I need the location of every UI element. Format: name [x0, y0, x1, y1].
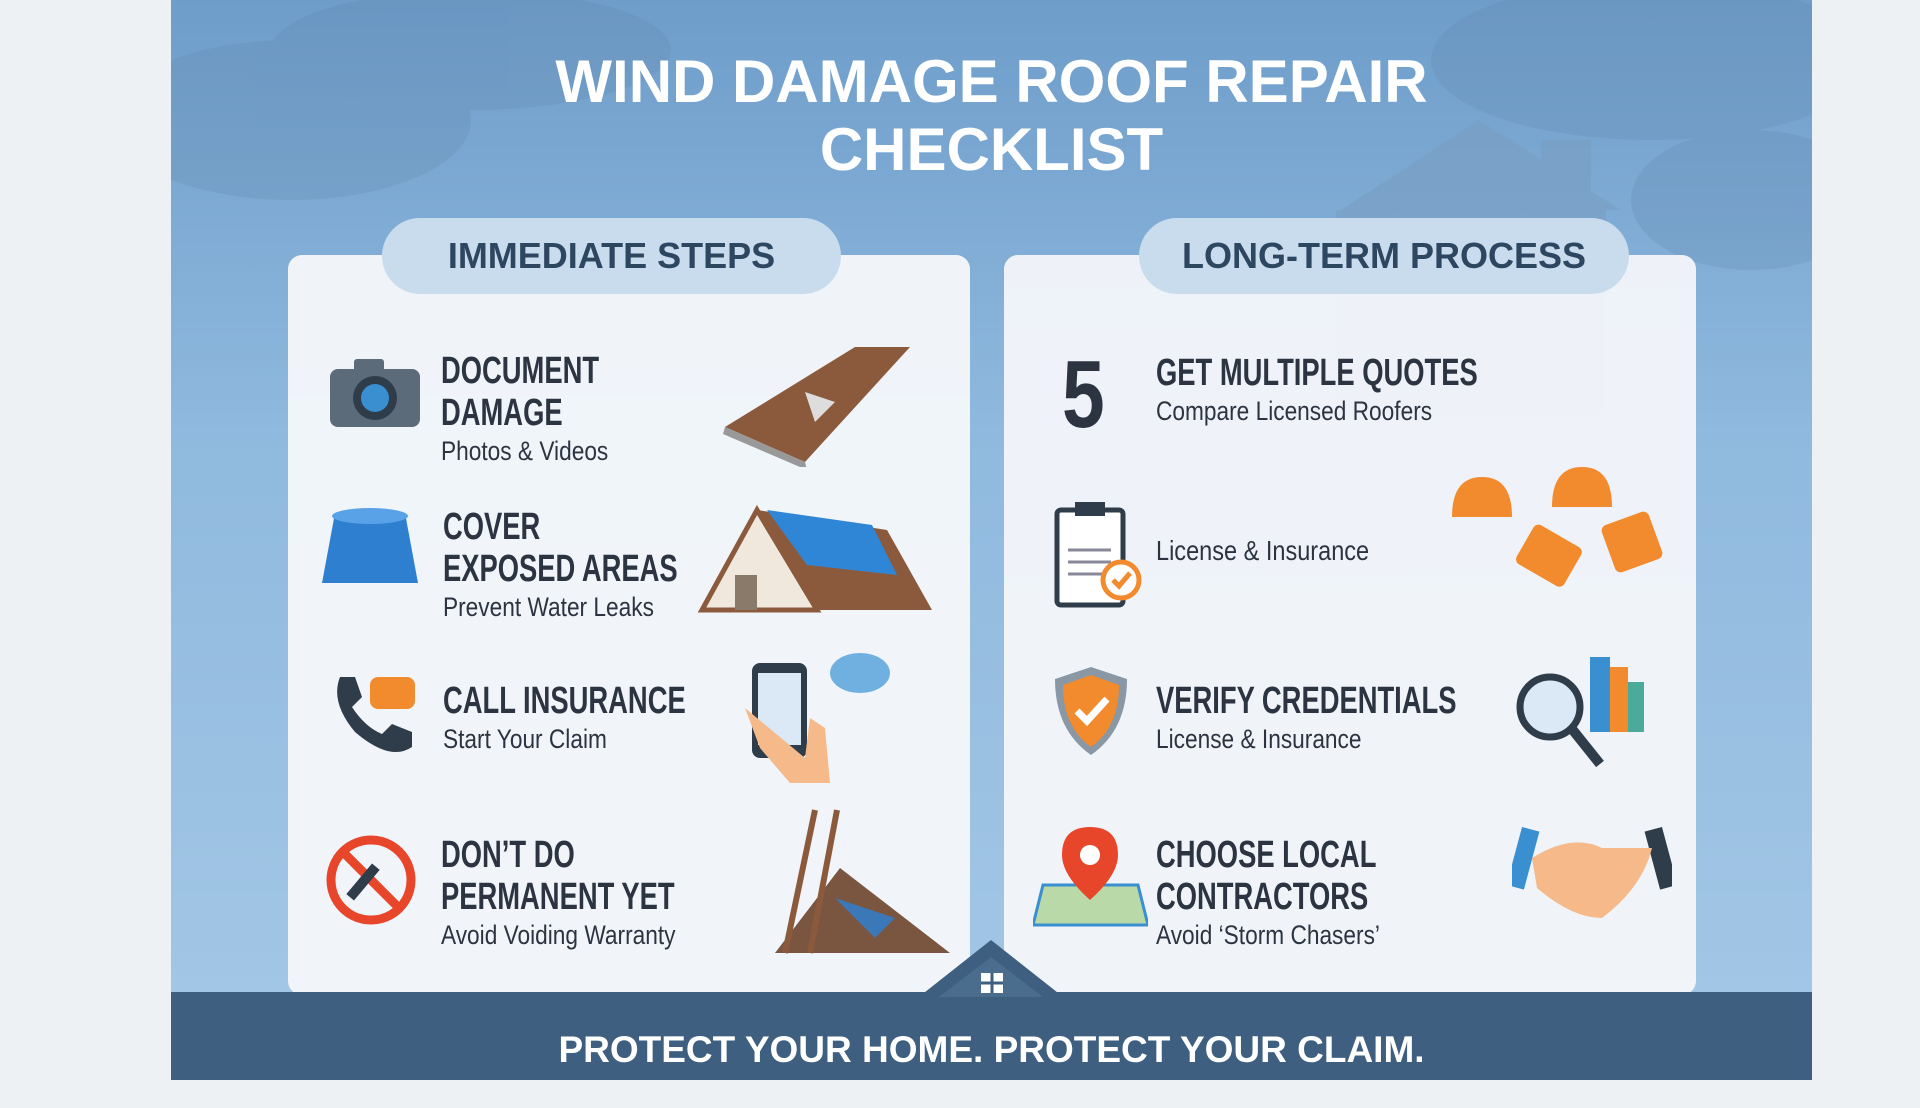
illustration: handshake: [1512, 827, 1672, 918]
text: cover exposed areas: [443, 506, 678, 622]
text: call insurance: Start Your Claim: [443, 724, 607, 754]
text: cover exposed areas: COVER: [443, 506, 540, 548]
title: CHECKLIST: [820, 116, 1163, 183]
text: document damage: Photos & Videos: [441, 436, 608, 466]
heading: long-term process: LONG-TERM PROCESS: [1182, 235, 1586, 276]
text: call insurance: CALL INSURANCE: [443, 680, 686, 722]
text: get multiple quotes: GET MULTIPLE QUOTES: [1156, 352, 1478, 394]
text: don't do permanent yet: [441, 834, 676, 950]
illustration: hand with phone: [745, 653, 890, 783]
text: document damage: DOCUMENT: [441, 350, 599, 392]
text: license & insurance: License & Insurance: [1156, 535, 1369, 566]
icon: camera: [330, 359, 420, 427]
text: call insurance: [443, 680, 686, 754]
heading: long-term process: [1139, 218, 1629, 294]
title: [555, 48, 1428, 183]
text: choose local contractors: CONTRACTORS: [1156, 876, 1368, 918]
illustration: house with tarp: [698, 505, 932, 612]
icon: tarp: [322, 508, 418, 583]
text: document damage: DAMAGE: [441, 392, 563, 434]
number 5: 5: [1062, 341, 1105, 448]
illustration: damaged roof: [723, 347, 910, 467]
text: verify credentials: [1156, 680, 1456, 754]
panel: long-term process: [1004, 255, 1696, 995]
title: WIND DAMAGE ROOF REPAIR: [555, 48, 1428, 115]
footer bar: PROTECT YOUR HOME. PROTECT YOUR CLAIM.: [558, 1029, 1425, 1070]
heading: immediate steps: [382, 218, 841, 294]
panel: immediate steps: [288, 255, 970, 995]
text: get multiple quotes: Compare Licensed Roofers: [1156, 396, 1432, 426]
icon: map pin: [1033, 827, 1148, 926]
text: don't do permanent yet: Avoid Voiding Warranty: [441, 920, 675, 950]
icon: house on footer: [925, 940, 1057, 997]
text: document damage: [441, 350, 608, 466]
text: cover exposed areas: EXPOSED AREAS: [443, 548, 678, 590]
text: choose local contractors: Avoid ‘Storm Chasers’: [1156, 920, 1380, 950]
illustration: magnifier and buildings: [1516, 657, 1644, 768]
text: don't do permanent yet: DON’T DO: [441, 834, 575, 876]
text: cover exposed areas: Prevent Water Leaks: [443, 592, 654, 622]
icon: clipboard: [1054, 502, 1142, 608]
text: choose local contractors: CHOOSE LOCAL: [1156, 834, 1376, 876]
icon: no hammer: [326, 836, 416, 924]
illustration: ladder on roof: [775, 809, 950, 954]
illustration: hard hats and price tags: [1452, 467, 1662, 587]
icon: shield: [1055, 667, 1127, 755]
text: get multiple quotes: [1156, 352, 1478, 426]
footer bar: [171, 992, 1812, 1080]
text: choose local contractors: [1156, 834, 1380, 950]
text: don't do permanent yet: PERMANENT YET: [441, 876, 675, 918]
text: verify credentials: VERIFY CREDENTIALS: [1156, 680, 1456, 722]
text: verify credentials: License & Insurance: [1156, 724, 1362, 754]
icon: phone with chat: [337, 677, 415, 752]
heading: immediate steps: IMMEDIATE STEPS: [448, 235, 775, 276]
